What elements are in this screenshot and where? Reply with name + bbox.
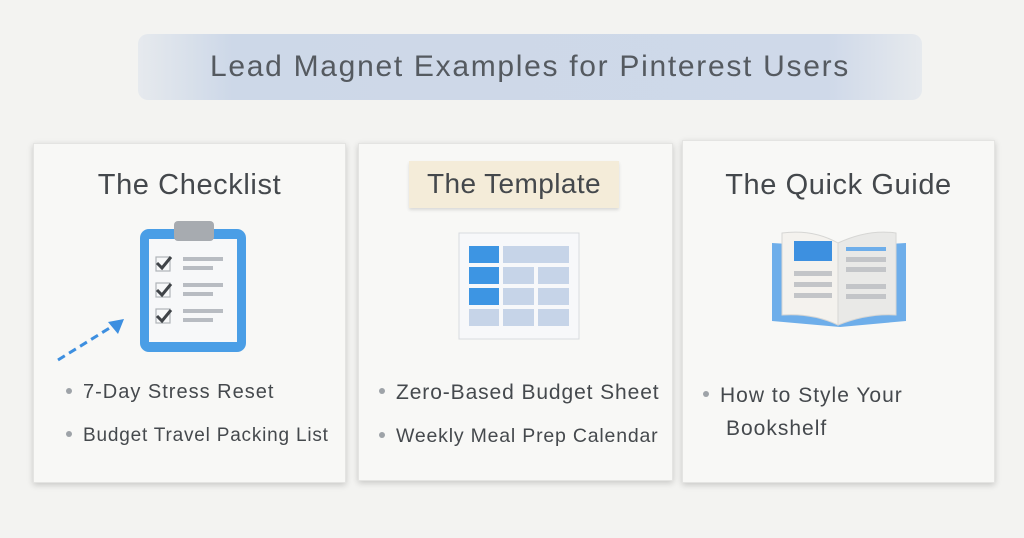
arrow: dashed (57, 319, 124, 362)
icon: clipboard (140, 221, 246, 352)
list: template: Zero-Based Budget Sheet (396, 381, 660, 404)
panel: checklist (33, 143, 346, 483)
panel: quick guide (682, 140, 995, 483)
title: Lead Magnet Examples for Pinterest Users (210, 50, 850, 83)
icon: table (458, 232, 580, 340)
heading: checklist: The Checklist (98, 169, 281, 201)
panel: template (358, 143, 673, 481)
list: template (379, 381, 660, 447)
heading: template (409, 161, 619, 208)
icon: book (772, 232, 906, 327)
title band (138, 34, 922, 100)
heading: template: The Template (427, 168, 601, 199)
list: quick guide (703, 384, 903, 440)
list: checklist (66, 381, 329, 446)
list: template: Weekly Meal Prep Calendar (396, 425, 658, 447)
heading: quick guide: The Quick Guide (725, 169, 952, 201)
list: checklist: Budget Travel Packing List (83, 425, 329, 446)
list: quick guide: Bookshelf (726, 417, 827, 440)
list: quick guide: How to Style Your (720, 384, 903, 407)
list: checklist: 7-Day Stress Reset (83, 381, 274, 403)
